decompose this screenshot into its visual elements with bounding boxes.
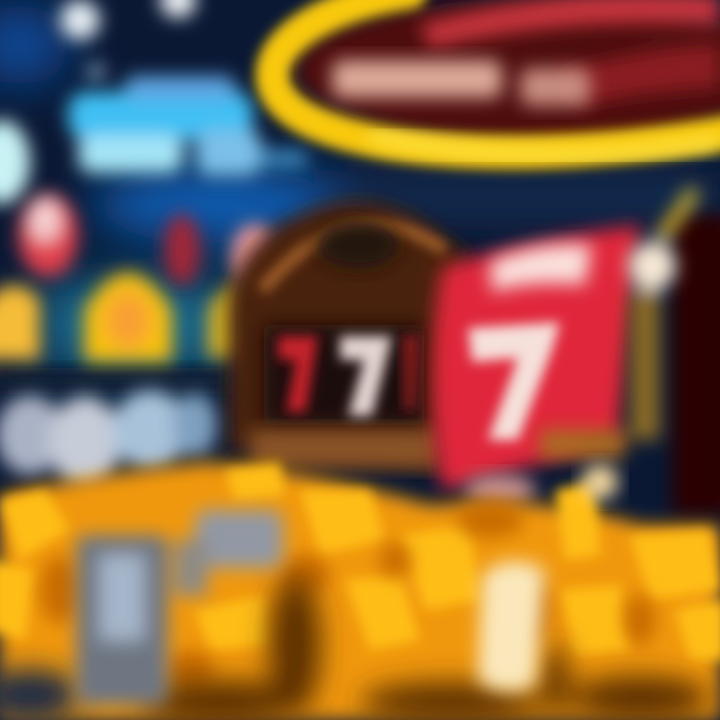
icon: cream coin top bbox=[582, 464, 618, 500]
icon: yellow slot windows bbox=[0, 272, 255, 362]
text block: glowing blue headline bbox=[68, 76, 308, 176]
panel: wooden slot machine bbox=[228, 201, 470, 470]
icon: pale glowing orb bbox=[0, 120, 30, 204]
icon: cream coin stack bbox=[478, 561, 545, 691]
panel: dark band under slots bbox=[0, 368, 230, 394]
icon: silver coin row bbox=[0, 390, 217, 488]
deep orange coin shadows bbox=[40, 502, 656, 690]
icon: silver coin stack bbox=[76, 510, 283, 705]
machine inner crown bbox=[316, 221, 400, 269]
panel: jackpot sign bbox=[272, 0, 720, 156]
sign golden ring bbox=[272, 0, 720, 152]
sign interior bbox=[295, 0, 720, 142]
icon: balloons bbox=[18, 193, 279, 292]
panel: red slot reel bbox=[432, 225, 640, 506]
bright coin highlights bbox=[0, 462, 720, 660]
reel top white shape bbox=[490, 244, 592, 292]
sign ring highlight bbox=[370, 135, 720, 156]
reel red body bbox=[432, 225, 640, 490]
icon: red seven bbox=[278, 336, 318, 412]
sign red stripes bbox=[420, 0, 720, 106]
panel: heap of gold coins bbox=[0, 462, 720, 720]
reel lower label bbox=[464, 474, 536, 506]
panel: night sky background with blue glows bbox=[0, 5, 720, 370]
dark gaps between coins bbox=[0, 575, 710, 720]
icon: big white seven bbox=[468, 322, 560, 440]
machine arch trim bbox=[262, 225, 445, 290]
icon: dark red seven bbox=[402, 335, 420, 410]
machine wooden arch bbox=[228, 201, 470, 470]
machine base bbox=[250, 430, 440, 468]
icon: golden lever bbox=[540, 190, 695, 458]
coin heap base bbox=[0, 462, 720, 720]
icon: sparkling stars bbox=[60, 0, 196, 81]
text block: sign lettering bbox=[332, 60, 590, 106]
icon: white seven bbox=[340, 336, 392, 416]
panel: dark right cabinet bbox=[672, 215, 720, 515]
machine reels window bbox=[264, 325, 424, 425]
